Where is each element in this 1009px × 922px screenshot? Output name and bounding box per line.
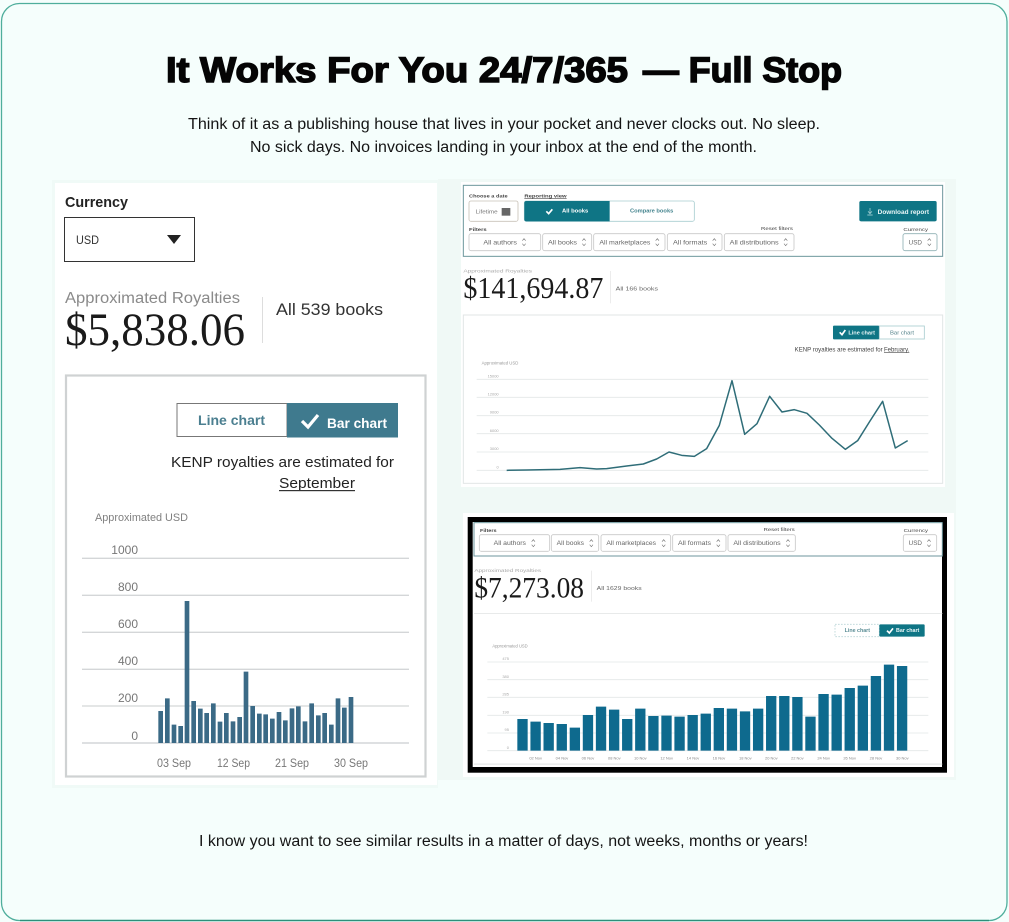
filter controls: Download report: [878, 210, 929, 216]
filter controls: All formats: [673, 240, 708, 247]
bar chart: 285: [502, 692, 510, 697]
line chart toggle: Line chart: [198, 412, 265, 428]
panel: September bar chart dashboard: [52, 180, 438, 788]
filter controls: All marketplaces: [599, 240, 651, 247]
royalties summary: All 1629 books: [597, 586, 642, 592]
bar chart: 475: [502, 656, 510, 661]
currency dropdown: USD: [76, 233, 99, 247]
bar chart: 400: [118, 654, 138, 668]
bar chart: 18 Nov: [739, 756, 752, 761]
KENP note: September: [279, 476, 355, 492]
intro text: Think of it as a publishing house that lives in your pocket and never clocks out. No sleep.: [188, 116, 820, 133]
filter controls: [463, 185, 943, 256]
closing text: I know you want to see similar results in a matter of days, not weeks, months or years!: [199, 833, 808, 850]
bar chart: 30 Sep: [334, 758, 368, 770]
book count: All 539 books: [276, 301, 383, 319]
line chart: February.: [884, 347, 910, 353]
bar chart toggle: [287, 403, 398, 438]
screenshot backdrop: [438, 179, 956, 780]
royalties summary: $141,694.87: [463, 271, 603, 305]
chart toggle: Line chart: [845, 628, 870, 634]
filter controls: USD: [909, 540, 922, 547]
royalties summary: [474, 568, 942, 614]
filter controls: [474, 523, 942, 556]
line chart: [463, 315, 943, 483]
bar chart: 0: [131, 729, 138, 743]
filter controls: Lifetime: [476, 209, 498, 215]
royalties summary: Approximated Royalties: [474, 568, 542, 574]
royalties amount: $5,838.06: [65, 304, 245, 356]
royalties summary: All 166 books: [616, 287, 658, 293]
royalties summary: $7,273.08: [474, 573, 584, 605]
line chart toggle: [177, 404, 287, 436]
bar chart: 600: [118, 617, 138, 631]
filter controls: Reporting view: [524, 193, 567, 199]
chart toggle: [835, 624, 925, 637]
bar chart: 26 Nov: [843, 756, 856, 761]
currency label: Currency: [65, 194, 129, 211]
bar chart: 190: [502, 709, 510, 714]
line chart: 12000: [488, 392, 499, 397]
KENP note: [171, 455, 394, 492]
bar chart: 1000: [111, 543, 138, 557]
bar chart toggle: Bar chart: [327, 415, 387, 431]
bar chart: 95: [505, 727, 510, 732]
line chart: Bar chart: [890, 330, 914, 336]
bar chart: 08 Nov: [608, 756, 621, 761]
bar chart: 12 Nov: [660, 756, 673, 761]
bar chart: 30 Nov: [896, 756, 909, 761]
bar chart: 22 Nov: [791, 756, 804, 761]
filter controls: Currency: [903, 227, 929, 233]
currency dropdown: [64, 218, 194, 262]
royalties summary: Approximated Royalties: [463, 268, 533, 274]
line chart: 3000: [490, 446, 499, 451]
bar chart: 28 Nov: [870, 756, 882, 761]
bar chart: 04 Nov: [556, 756, 568, 761]
filter controls: All distributions: [730, 240, 779, 247]
filter controls: Filters: [480, 528, 497, 534]
chart toggle: Bar chart: [896, 628, 920, 634]
royalties label: Approximated Royalties: [65, 290, 240, 307]
line chart: 15000: [488, 373, 499, 378]
bar chart: [474, 643, 942, 764]
bar chart: 06 Nov: [582, 756, 594, 761]
filter controls: Choose a date: [469, 193, 508, 199]
filter controls: All books: [548, 240, 578, 247]
bar chart: Approximated USD: [95, 512, 188, 524]
intro text: [188, 116, 820, 156]
filter controls: All marketplaces: [606, 540, 656, 547]
bar chart: 380: [502, 674, 510, 679]
line chart: KENP royalties are estimated for: [795, 347, 883, 353]
filter controls: All books: [557, 540, 584, 547]
filter controls: All books: [562, 209, 588, 215]
bar chart: 14 Nov: [687, 756, 699, 761]
line chart: Approximated USD: [482, 360, 518, 365]
bar chart: 0: [507, 745, 510, 750]
filter controls: All distributions: [733, 540, 781, 547]
title: [166, 51, 842, 90]
bar chart: 02 Nov: [529, 756, 542, 761]
KENP note: KENP royalties are estimated for: [171, 455, 394, 471]
filter controls: USD: [909, 240, 922, 247]
filter controls: Currency: [904, 528, 929, 534]
bar chart: 20 Nov: [765, 756, 778, 761]
filter controls: Filters: [469, 227, 487, 233]
filter controls: Compare books: [630, 209, 673, 215]
title: It Works For You 24/7/365: [166, 51, 628, 90]
intro text: No sick days. No invoices landing in your inbox at the end of the month.: [250, 139, 757, 156]
bar chart: 16 Nov: [713, 756, 725, 761]
bar chart: [82, 512, 409, 770]
bar chart: 200: [118, 691, 138, 705]
panel: November bar chart dashboard: [463, 513, 954, 777]
chart frame: [66, 376, 426, 776]
line chart: Line chart: [848, 330, 875, 336]
filter controls: All authors: [483, 240, 518, 247]
filter controls: All formats: [678, 540, 711, 547]
bar chart: 800: [118, 580, 138, 594]
panel: lifetime line chart dashboard: [461, 182, 945, 487]
bar chart: 10 Nov: [634, 756, 647, 761]
line chart: 0: [496, 464, 499, 469]
title: — Full Stop: [643, 51, 842, 90]
filter controls: Reset filters: [764, 527, 795, 533]
bar chart: 12 Sep: [217, 758, 250, 770]
line chart: 6000: [490, 428, 499, 433]
bar chart: 24 Nov: [817, 756, 830, 761]
filter controls: Reset filters: [761, 226, 794, 232]
filter controls: All authors: [494, 540, 526, 547]
line chart: 9000: [490, 410, 499, 415]
bar chart: 03 Sep: [157, 758, 191, 770]
bar chart: 21 Sep: [275, 758, 309, 770]
bar chart: Approximated USD: [492, 643, 528, 648]
